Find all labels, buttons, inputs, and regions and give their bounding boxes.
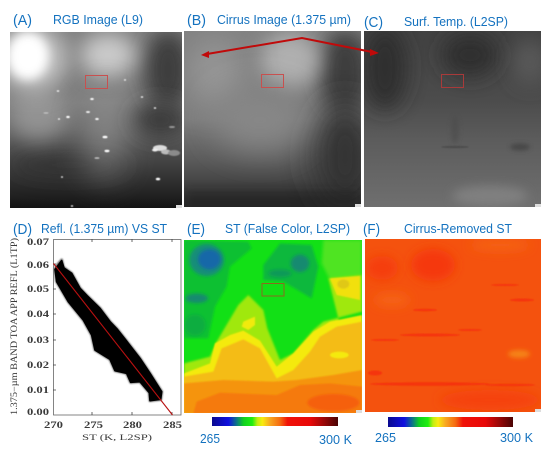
x axis tick labels: 275 (84, 420, 104, 430)
y axis tick labels: 0.01 (27, 385, 50, 395)
color bar labels: 300 K (500, 430, 533, 445)
x axis tick labels: 280 (123, 420, 143, 430)
y axis tick labels: 0.00 (27, 407, 50, 417)
heading: B: Cirrus Image (1.375 µm) (217, 12, 351, 27)
false color map (365, 239, 541, 412)
heading: F: Cirrus-Removed ST (404, 221, 512, 236)
heading: D: (D) (13, 221, 32, 238)
heading: B (187, 12, 351, 29)
heading: D: Refl. (1.375 µm) VS ST (41, 221, 167, 236)
heading: F: (F) (363, 221, 380, 238)
y axis tick labels: 0.07 (27, 237, 50, 247)
heading: B: (B) (187, 12, 206, 29)
x axis tick labels: 285 (163, 420, 183, 430)
panel: F cirrus-removed ST (363, 221, 541, 445)
false color map (184, 240, 362, 413)
arrow: red double-headed arrow (201, 38, 379, 58)
panel: C surface temperature (363, 14, 546, 207)
y axis tick labels: 0.02 (27, 360, 50, 370)
satellite image: RGB (10, 32, 182, 208)
heading: C: (C) (364, 14, 383, 31)
y axis tick labels (27, 237, 50, 417)
heading: C (364, 14, 508, 31)
heading: C: Surf. Temp. (L2SP) (404, 14, 508, 29)
satellite image: surface temperature (363, 26, 546, 207)
heading: E: ST (False Color, L2SP) (225, 221, 350, 236)
x axis tick labels: 270 (44, 420, 64, 430)
red box (262, 74, 284, 88)
clouds and bright specks (44, 79, 180, 207)
plot frame and ticks (53, 239, 181, 415)
heading: A: RGB Image (L9) (53, 12, 143, 27)
heading: F (363, 221, 512, 238)
heading: A (13, 12, 143, 29)
red box (262, 284, 284, 296)
panel: E false color ST (184, 221, 362, 447)
y axis title: 1.375−µm BAND TOA APP REFL (L1TP) (9, 238, 19, 415)
panel: D scatter plot (9, 221, 183, 442)
y axis tick labels: 0.03 (27, 335, 50, 345)
heading: D (13, 221, 167, 238)
red box (86, 76, 108, 88)
panel: B cirrus image (184, 14, 361, 207)
x axis tick labels (44, 420, 183, 430)
satellite image: cirrus (184, 31, 361, 207)
color bar labels (375, 430, 533, 445)
heading: E (187, 221, 350, 238)
color bar labels: 265 (375, 430, 396, 445)
x axis title: ST (K, L2SP) (82, 432, 152, 442)
panel: A RGB image (10, 14, 182, 208)
color bar labels (200, 431, 352, 447)
color bar labels: 265 (200, 431, 220, 446)
y axis tick labels: 0.05 (27, 284, 50, 294)
y axis tick labels: 0.04 (27, 309, 50, 319)
color bar (388, 417, 513, 427)
color bar (212, 417, 338, 426)
y axis tick labels: 0.06 (27, 260, 50, 270)
red box (442, 74, 464, 88)
heading: E: (E) (187, 221, 205, 238)
heading: A: (A) (13, 12, 32, 29)
regression line (54, 264, 172, 415)
color bar labels: 300 K (319, 432, 352, 447)
scatter cloud (55, 260, 162, 401)
